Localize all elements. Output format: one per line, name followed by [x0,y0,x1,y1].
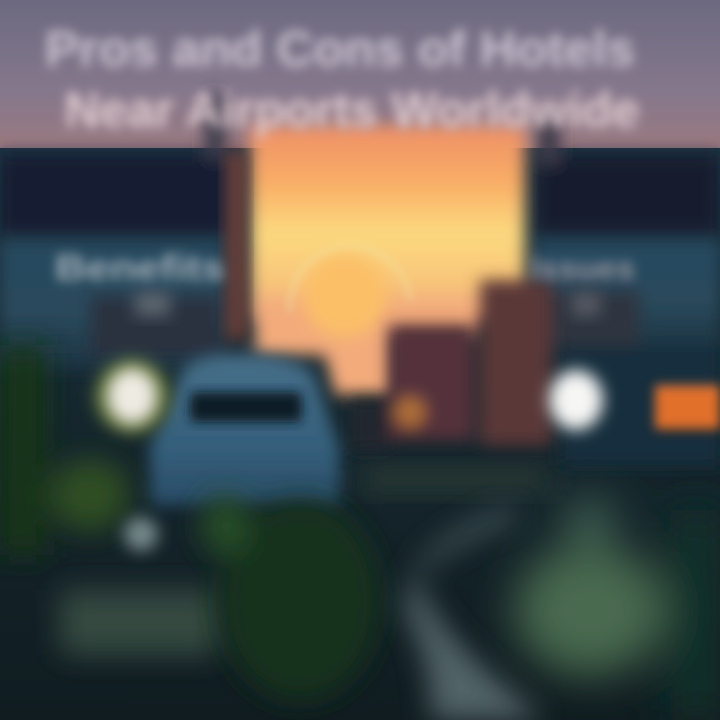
lower-left garden [60,590,220,655]
right heading: Issues [530,250,635,286]
background: lower street [0,148,720,720]
central brown towers [350,280,552,450]
title: Near Airports Worldwide [64,82,640,138]
background: dusk sky [0,0,720,150]
centre foliage [201,495,380,700]
road strip [360,468,550,492]
left sub-text [135,292,170,316]
left foliage [0,345,130,555]
small white lamp [124,517,158,551]
left heading: Benefits [55,247,225,288]
left lamp [94,358,170,434]
orange sign [655,385,720,429]
brown tower edge [226,150,246,340]
right sub-text [572,292,600,316]
title [45,21,640,138]
sun ring [290,246,410,312]
sunset glow [250,125,525,395]
path [405,510,545,720]
left building [0,95,230,370]
title: Pros and Cons of Hotels [45,21,635,77]
right foliage [515,502,720,720]
right building [535,115,720,465]
van windscreen [190,392,302,422]
camper van [150,354,340,505]
right lamp [549,370,603,430]
